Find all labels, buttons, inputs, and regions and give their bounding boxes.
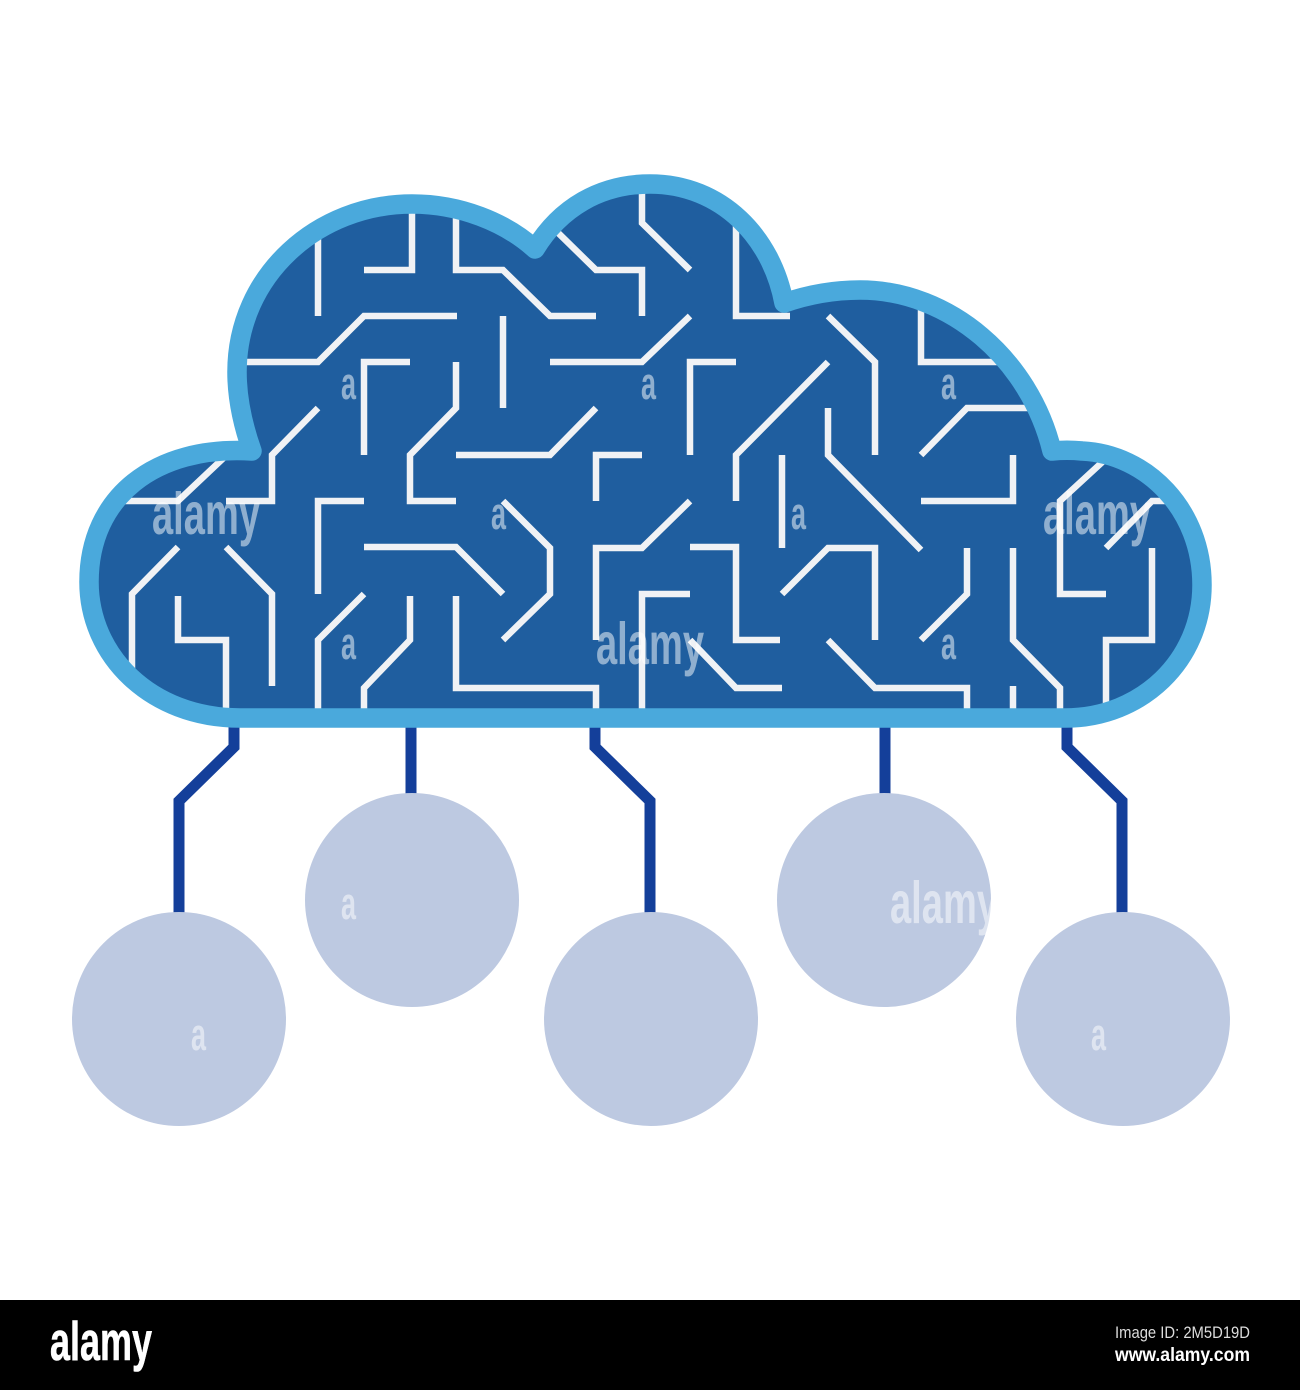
- watermarks: a: [491, 488, 507, 539]
- cloud fill: [89, 184, 1202, 718]
- watermarks: alamy: [152, 481, 260, 547]
- watermarks: a: [341, 358, 357, 409]
- watermarks: alamy: [1043, 481, 1151, 547]
- watermark mask outside node 4: [991, 870, 1011, 940]
- connector: node 2: [406, 725, 416, 797]
- connector lines: [179, 725, 1122, 915]
- circuit traces inside cloud: [100, 180, 1200, 720]
- footer logo: alamy: [50, 1310, 152, 1372]
- footer image id: Image ID: 2M5D19D: [1115, 1324, 1250, 1342]
- circle: node 1: [72, 912, 286, 1126]
- node circles: [72, 793, 1230, 1126]
- circle: node 5: [1016, 912, 1230, 1126]
- watermarks: a: [341, 618, 357, 669]
- footer bar: [0, 1300, 1300, 1390]
- connector: node 1: [179, 725, 234, 915]
- circle: node 3: [544, 912, 758, 1126]
- connector: node 3: [595, 725, 650, 915]
- watermarks: a: [791, 488, 807, 539]
- watermarks: a: [1091, 1009, 1107, 1060]
- watermarks: [152, 358, 1151, 1060]
- watermarks: a: [641, 358, 657, 409]
- watermarks: a: [941, 358, 957, 409]
- watermarks: a: [191, 1009, 207, 1060]
- watermarks: a: [941, 618, 957, 669]
- watermarks: a: [341, 878, 357, 929]
- cloud outline: [89, 184, 1202, 718]
- connector: node 4: [880, 725, 890, 797]
- watermarks: alamy: [596, 611, 704, 677]
- footer url: www.alamy.com: [1114, 1345, 1250, 1366]
- circle: node 4: [777, 793, 991, 1007]
- connector: node 5: [1067, 725, 1122, 915]
- circle: node 2: [305, 793, 519, 1007]
- watermarks: alamy: [890, 870, 998, 936]
